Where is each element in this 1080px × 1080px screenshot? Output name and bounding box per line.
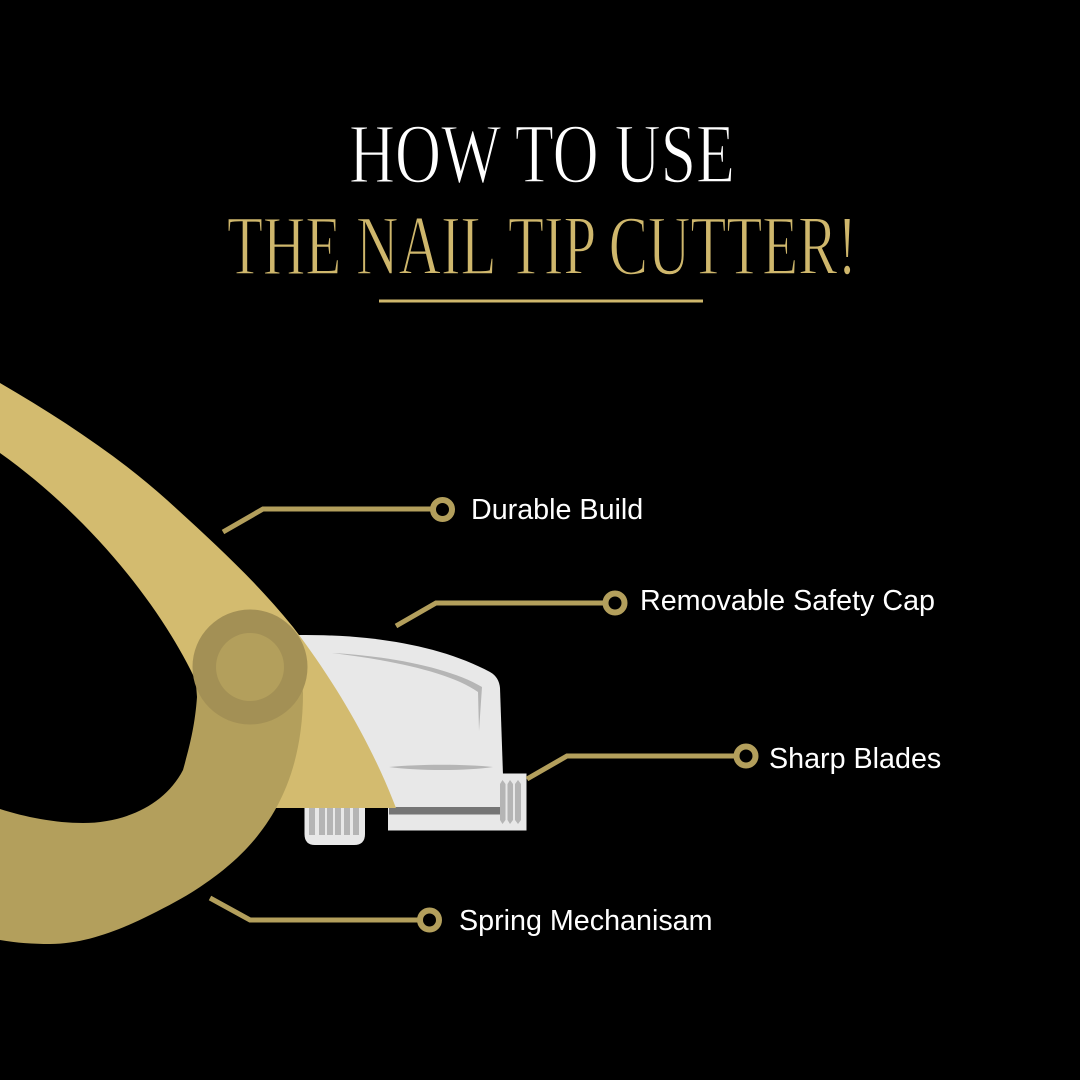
title line 1: HOW TO USE [349, 107, 735, 201]
callout: removable safety cap [396, 585, 935, 626]
callout: spring mechanism [210, 898, 713, 937]
cap highlights [332, 653, 493, 770]
callout: sharp blades [527, 743, 941, 779]
blade slot [389, 807, 500, 814]
leader line [396, 603, 605, 626]
title underline [379, 300, 703, 302]
label: Removable Safety Cap [640, 585, 935, 617]
leader dot [606, 594, 624, 612]
illustration: nail tip cutter [0, 383, 526, 944]
leader line [210, 898, 420, 920]
label: Spring Mechanisam [459, 905, 713, 937]
pivot inner [216, 633, 284, 701]
safety cap body [296, 635, 503, 805]
pivot outer [192, 610, 308, 724]
tab ridges [309, 808, 359, 835]
callout: durable build [223, 494, 643, 532]
title [227, 107, 857, 302]
lower handle [0, 660, 303, 944]
leader dot [433, 500, 452, 519]
label: Sharp Blades [769, 743, 941, 775]
upper handle [0, 383, 396, 808]
leader line [527, 756, 736, 779]
leader dot [736, 746, 756, 766]
bottom tab [304, 806, 365, 845]
label: Durable Build [471, 494, 643, 526]
leader dot [420, 910, 439, 930]
blade teeth [500, 780, 521, 824]
blade housing [388, 774, 526, 830]
leader line [223, 509, 432, 532]
